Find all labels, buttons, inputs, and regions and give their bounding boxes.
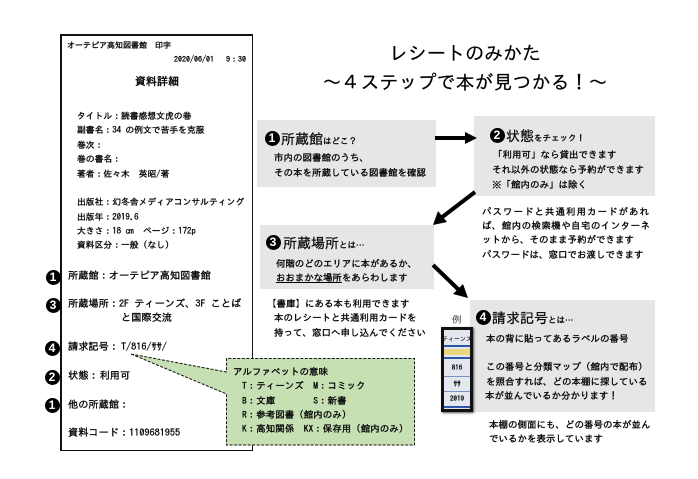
receipt key fields: 請求記号：T/816/ｻｻ/ bbox=[68, 342, 167, 352]
step 4 note: でいるかを表示しています bbox=[489, 435, 603, 444]
panel: step 4 bbox=[470, 300, 655, 412]
title: レシートのみかた bbox=[389, 44, 541, 63]
receipt book details: 大きさ：18 ㎝ ページ：172p bbox=[77, 227, 196, 236]
icon: number 2 bbox=[44, 370, 60, 384]
step 4 heading: 請求記号とは… bbox=[492, 311, 574, 325]
receipt key fields: 他の所蔵館： bbox=[68, 400, 129, 410]
icon: step 1 number: 1 bbox=[269, 130, 275, 144]
callout text: アルファベットの意味 bbox=[233, 368, 328, 377]
panel: step 3: 何階のどのエリアに本があるか、 bbox=[276, 260, 417, 269]
panel: step 2: それ以外の状態なら予約ができます bbox=[492, 166, 644, 175]
icon: step 2 number bbox=[490, 128, 504, 142]
icon: number 4: 4 bbox=[49, 340, 55, 354]
receipt book details: 副書名：34 の例文で苦手を克服 bbox=[77, 126, 205, 135]
callout text: K：高知関係 KX：保存用（館内のみ） bbox=[242, 425, 408, 434]
icon: number 2: 2 bbox=[49, 370, 55, 384]
icon: number 1: 1 bbox=[50, 270, 56, 284]
icon: number 4 bbox=[44, 340, 60, 356]
panel: receipt bbox=[60, 34, 253, 451]
arrow: step 1 to step 2 bbox=[435, 132, 477, 144]
step 3 note: 本のレシートと共通利用カードを bbox=[274, 314, 416, 323]
panel: step 4: 本が並んでいるか分かります！ bbox=[485, 392, 618, 401]
callout: alphabet meaning bbox=[130, 354, 415, 446]
step 3 heading: 所蔵場所とは… bbox=[283, 236, 364, 250]
step 2 note: パスワードと共通利用カードがあれ bbox=[482, 208, 650, 217]
step 3 note bbox=[267, 298, 426, 338]
receipt book details bbox=[77, 111, 244, 250]
panel: step 3: おおまかな場所をあらわします bbox=[276, 274, 408, 283]
step 1 heading: 所蔵館はどこ？ bbox=[281, 132, 357, 146]
title: ～４ステップで本が見つかる！～ bbox=[322, 73, 608, 92]
step 4 note bbox=[489, 420, 650, 444]
icon: number 1 bbox=[46, 270, 60, 284]
panel: step 1: その本を所蔵している図書館を確認 bbox=[274, 169, 426, 178]
panel: step 4: を照合すれば、どの本棚に探している bbox=[486, 378, 648, 387]
panel: step 1: 市内の図書館のうち、 bbox=[274, 154, 369, 163]
step 3 note: 【書庫】にある本も利用できます bbox=[267, 300, 410, 309]
icon: number 3 bbox=[46, 298, 60, 312]
step 4 note: 本棚の側面にも、どの番号の本が並ん bbox=[489, 421, 650, 430]
icon: step 4 number bbox=[476, 310, 490, 324]
step 2 note bbox=[482, 206, 650, 260]
panel: step 2: 「利用可」なら貸出できます bbox=[493, 151, 616, 160]
icon: number 3: 3 bbox=[50, 298, 56, 312]
receipt header: 資料詳細 bbox=[135, 76, 179, 87]
receipt key fields: 所蔵場所：2F ティーンズ、3F ことば bbox=[68, 299, 241, 309]
receipt header: 2020/06/01 9：30 bbox=[174, 55, 246, 63]
book spine label photo: 816 bbox=[452, 364, 462, 371]
callout text: R：参考図書（館内のみ） bbox=[242, 411, 351, 420]
icon: step 3 number: 3 bbox=[270, 234, 276, 248]
arrow: step 2 to step 3 bbox=[433, 190, 476, 225]
receipt key fields: 所蔵館：オーテピア高知図書館 bbox=[68, 271, 211, 281]
receipt book details: 資料区分：一般（なし） bbox=[77, 241, 174, 250]
receipt book details: 巻次： bbox=[77, 141, 103, 150]
receipt book details: 巻の書名： bbox=[77, 155, 121, 164]
icon: step 2 number: 2 bbox=[494, 128, 500, 142]
panel: step 4: この番号と分類マップ（館内で配布） bbox=[486, 363, 648, 372]
receipt key fields: 資料コード：1109681955 bbox=[68, 428, 180, 438]
icon: step 1 number bbox=[264, 130, 280, 146]
callout text: B：文庫 S：新書 bbox=[242, 397, 346, 406]
step 3 note: 持って、窓口へ申し込んでください bbox=[274, 329, 426, 338]
panel: step 2 bbox=[474, 116, 655, 196]
icon: step 4 number: 4 bbox=[480, 310, 486, 324]
panel: step 3 bbox=[260, 225, 434, 289]
receipt book details: 出版年：2019.6 bbox=[77, 213, 139, 222]
callout text bbox=[233, 366, 408, 434]
book spine label photo: 2019 bbox=[450, 395, 464, 402]
panel: step 4: 本の背に貼ってあるラベルの番号 bbox=[486, 335, 628, 344]
step 2 note: ットから、そのまま予約ができます bbox=[482, 236, 634, 245]
receipt header bbox=[67, 41, 246, 87]
book spine label photo bbox=[441, 327, 473, 412]
receipt book details: 著者：佐々木 英昭/著 bbox=[77, 170, 169, 179]
arrow: step 3 to step 4 bbox=[432, 264, 468, 298]
receipt key fields bbox=[45, 270, 242, 438]
step 2 heading: 状態をチェック！ bbox=[506, 129, 585, 143]
step 2 note: パスワードは、窓口でお渡しできます bbox=[482, 251, 644, 260]
panel: step 1 bbox=[257, 120, 436, 187]
title bbox=[322, 44, 608, 92]
icon: number 1 second bbox=[44, 398, 60, 412]
receipt key fields: と国際交流 bbox=[121, 313, 172, 323]
receipt book details: 出版社：幻冬舎メディアコンサルティング bbox=[77, 198, 244, 207]
receipt key fields: 状態：利用可 bbox=[68, 371, 130, 381]
panel: step 2: ※「館内のみ」は除く bbox=[492, 181, 587, 190]
icon: step 3 number bbox=[266, 234, 280, 250]
example label: 例 bbox=[452, 316, 462, 325]
receipt book details: タイトル：読書感想文虎の巻 bbox=[77, 112, 191, 121]
callout text: T：ティーンズ M：コミック bbox=[242, 382, 366, 391]
book spine label photo: ｻｻ bbox=[454, 380, 460, 387]
icon: number 1 second: 1 bbox=[49, 398, 55, 412]
receipt header: オーテピア高知図書館 印字 bbox=[67, 41, 171, 49]
step 2 note: ば、館内の検索機や自宅のインターネ bbox=[482, 222, 650, 231]
